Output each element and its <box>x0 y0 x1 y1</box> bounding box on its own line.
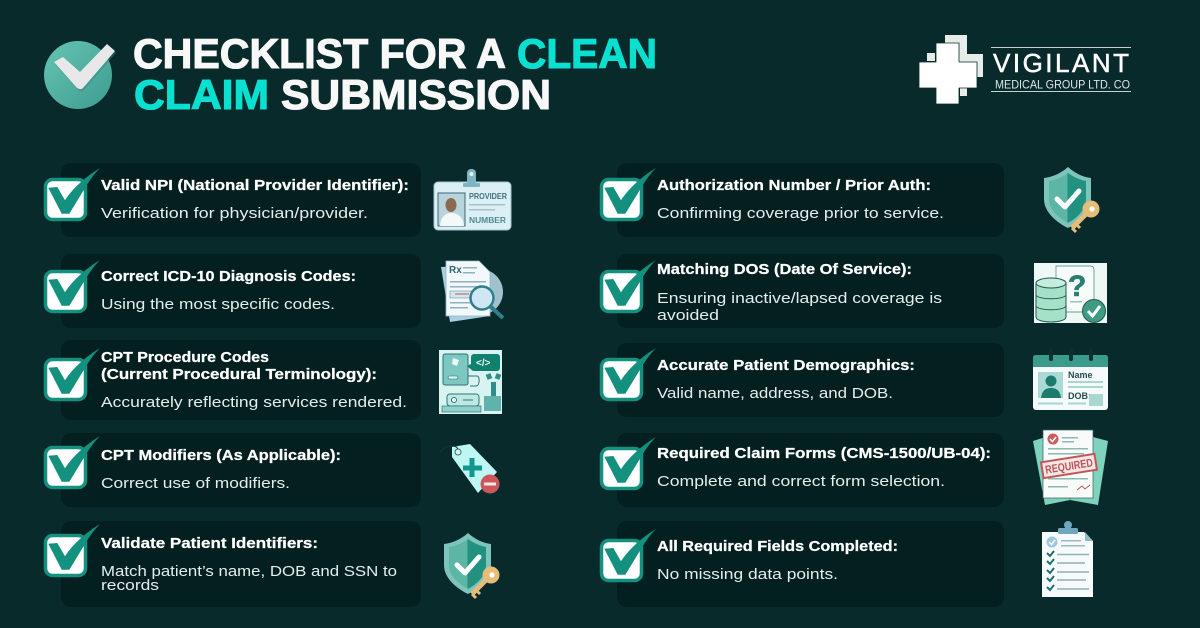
panel: authorization number <box>602 163 1004 237</box>
panel: ICD-10 codes <box>46 254 421 328</box>
panel: matching DOS: Matching DOS (Date Of Service): <box>657 262 912 278</box>
panel: patient demographics <box>602 343 1004 417</box>
panel: patient demographics: Valid name, address, and DOB. <box>657 386 893 402</box>
panel: CPT procedure codes: Accurately reflecting services rendered. <box>101 395 407 411</box>
icon: title check badge <box>44 41 116 109</box>
icon: patient card: Name <box>1068 370 1093 380</box>
icon: patient card: DOB: <box>1068 391 1091 401</box>
panel: patient demographics: Accurate Patient Demographics: <box>657 358 915 374</box>
panel: authorization number: Authorization Number / Prior Auth: <box>657 178 931 194</box>
panel: CPT modifiers <box>46 433 421 507</box>
logo: Vigilant Medical Group: VIGILANT <box>993 48 1129 78</box>
panel: required fields <box>602 521 1004 607</box>
icon: prescription document and magnifier <box>441 261 503 322</box>
panel: CPT procedure codes: (Current Procedural Terminology): <box>101 367 377 383</box>
panel: CPT modifiers: CPT Modifiers (As Applicable): <box>101 448 341 464</box>
panel: ICD-10 codes: Correct ICD-10 Diagnosis Codes: <box>101 269 356 285</box>
icon: prescription document and magnifier: Rx <box>449 265 462 276</box>
icon: code and tools: </> <box>476 358 491 369</box>
icon: database with question mark: ? <box>1068 270 1086 303</box>
panel: matching DOS: avoided <box>657 308 719 324</box>
panel: ICD-10 codes: Using the most specific codes. <box>101 297 335 313</box>
icon: shield with key <box>444 533 500 598</box>
panel: required fields: All Required Fields Completed: <box>657 539 898 555</box>
panel: required fields: No missing data points. <box>657 567 838 583</box>
icon: provider ID badge <box>434 169 511 230</box>
icon: patient card <box>1033 350 1108 410</box>
panel: patient identifiers: records <box>101 578 159 594</box>
panel: valid NPI: Verification for physician/provider. <box>101 206 368 222</box>
icon: required form <box>1033 430 1108 505</box>
panel: matching DOS <box>602 254 1004 328</box>
icon: required form: REQUIRED <box>1045 457 1094 477</box>
panel: claim forms: Required Claim Forms (CMS-1500/UB-04): <box>657 446 991 462</box>
panel: valid NPI <box>46 163 421 237</box>
title: CLEAN <box>517 30 657 77</box>
panel: patient identifiers <box>46 521 421 607</box>
panel: patient identifiers: Match patient’s name, DOB and SSN to <box>101 564 397 580</box>
panel: claim forms <box>602 433 1004 507</box>
title: CHECKLIST FOR A <box>133 30 506 77</box>
logo: Vigilant Medical Group: MEDICAL GROUP LTD. CO <box>995 80 1130 92</box>
icon: provider ID badge: NUMBER <box>469 216 506 225</box>
title: SUBMISSION <box>281 71 551 118</box>
panel: CPT procedure codes: CPT Procedure Codes <box>101 350 269 366</box>
panel: CPT procedure codes <box>46 340 421 420</box>
icon: tag with plus and minus <box>440 444 500 494</box>
icon: database with question mark <box>1034 263 1107 323</box>
icon: code and tools <box>439 350 502 414</box>
icon: shield with key, authorization <box>1044 167 1100 232</box>
title <box>133 30 657 118</box>
panel: CPT modifiers: Correct use of modifiers. <box>101 476 290 492</box>
icon: provider ID badge: PROVIDER <box>469 192 507 201</box>
title: CLAIM <box>134 71 269 118</box>
icon: clipboard checklist <box>1042 521 1093 597</box>
panel: authorization number: Confirming coverage prior to service. <box>657 206 944 222</box>
panel: patient identifiers: Validate Patient Identifiers: <box>101 536 318 552</box>
panel: claim forms: Complete and correct form selection. <box>657 474 945 490</box>
logo: Vigilant Medical Group <box>919 35 1131 104</box>
panel: matching DOS: Ensuring inactive/lapsed coverage is <box>657 291 942 307</box>
panel: valid NPI: Valid NPI (National Provider Identifier): <box>101 178 409 194</box>
